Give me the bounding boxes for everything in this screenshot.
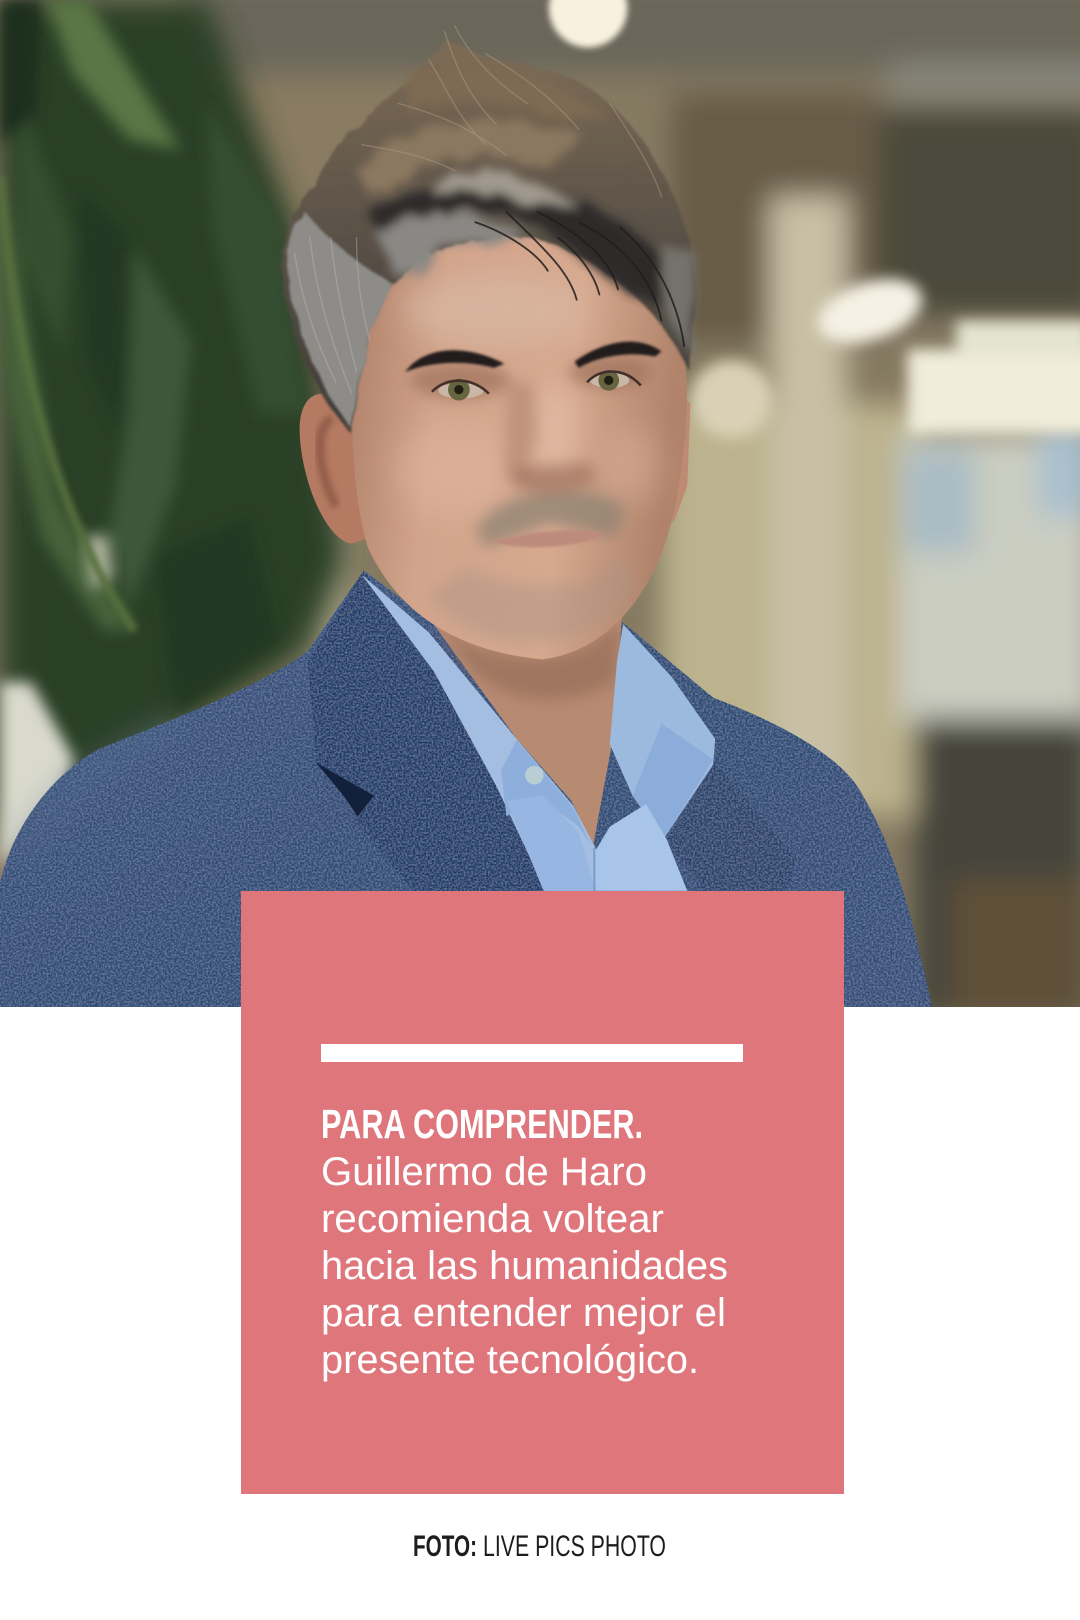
- caption body text: Guillermo de Haro: [321, 1150, 647, 1194]
- caption body text: para entender mejor el: [321, 1291, 726, 1335]
- photo: portrait of Guillermo de Haro: [0, 0, 1080, 1018]
- neck: [434, 618, 622, 844]
- panel: caption box: [241, 891, 844, 1494]
- shirt collar: [362, 575, 715, 891]
- caption body text: presente tecnológico.: [321, 1338, 699, 1382]
- eye sockets: [410, 356, 651, 494]
- photo credit: FOTO:: [413, 1530, 477, 1563]
- eyebrows: [405, 342, 661, 372]
- overhead lamp: [549, 0, 627, 48]
- person: [0, 26, 932, 1008]
- stubble and chin shadow: [429, 489, 639, 643]
- hair strands: [295, 26, 684, 393]
- photo credit: LIVE PICS PHOTO: [483, 1530, 666, 1563]
- caption body text: recomienda voltear: [321, 1197, 664, 1241]
- face: [352, 227, 687, 659]
- right ear: [672, 400, 690, 522]
- caption body text: hacia las humanidades: [321, 1244, 728, 1288]
- right lapel: [667, 763, 796, 891]
- background: hanging plants: [0, 0, 346, 868]
- jacket: [0, 570, 932, 1008]
- mouth: [494, 530, 605, 547]
- hair: [281, 26, 695, 434]
- left lapel: [308, 570, 546, 891]
- eyes: [432, 370, 641, 400]
- photo background: blurred office: [0, 0, 1080, 1018]
- cheek and forehead highlights: [398, 274, 659, 517]
- left ear: [300, 394, 372, 544]
- caption body text: [321, 1150, 728, 1382]
- caption heading: PARA COMPRENDER.: [321, 1101, 643, 1147]
- divider bar: [321, 1044, 743, 1062]
- photo credit: [413, 1530, 666, 1563]
